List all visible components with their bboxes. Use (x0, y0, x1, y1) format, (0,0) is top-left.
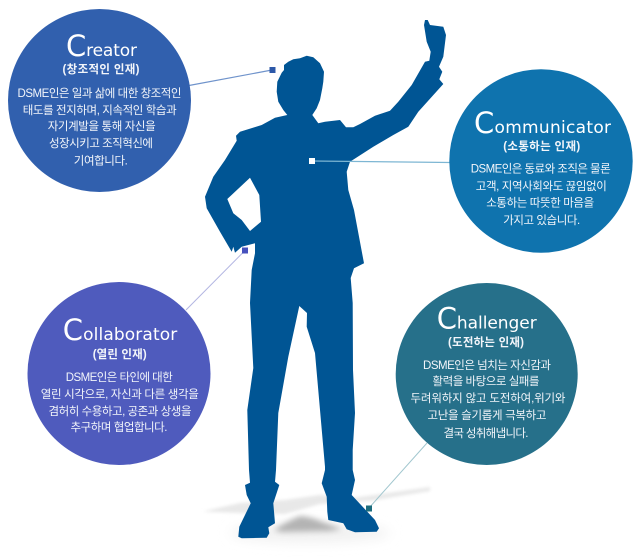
body text: Creator: 자기계발을 통해 자신을 (48, 120, 156, 133)
body text: Collaborator: DSME인은 타인에 대한 (66, 371, 173, 384)
body text: Creator: 성장시키고 조직혁신에 (49, 137, 153, 150)
heading: Collaborator: Collaborator (63, 313, 177, 347)
subheading: Collaborator: (열린 인재) (93, 347, 147, 361)
heading: Challenger: Challenger (437, 302, 537, 336)
body text: Communicator: 고객, 지역사회와도 끊임없이 (476, 180, 607, 193)
body text: Creator: DSME인은 일과 삶에 대한 창조적인 (18, 86, 182, 100)
body text: Creator: 태도를 전지하며, 지속적인 학습과 (23, 103, 177, 117)
heading: Communicator: Communicator (474, 106, 611, 140)
panel: Creator (8, 9, 191, 192)
floor shadow (203, 487, 430, 542)
body text: Collaborator: 열린 시각으로, 자신과 다른 생각을 (41, 388, 199, 401)
body text: Communicator (471, 162, 611, 227)
subheading: Communicator: (소통하는 인재) (503, 139, 580, 153)
panel: Collaborator (28, 282, 210, 465)
body text: Communicator: DSME인은 동료와 조직은 물론 (471, 162, 611, 176)
heading: Creator: Creator (66, 29, 137, 63)
body text: Communicator: 가지고 있습니다. (503, 214, 580, 227)
subheading: Creator: (창조적인 인재) (62, 62, 140, 76)
connector: Collaborator (186, 248, 248, 310)
body text: Collaborator (41, 371, 199, 434)
body text: Challenger: DSME인은 넘치는 자신감과 (423, 359, 551, 372)
body text: Challenger: 두려워하지 않고 도전하여,위기와 (410, 391, 566, 405)
body text: Communicator: 소통하는 따뜻한 마음을 (486, 196, 594, 210)
silhouette of a man raising a thumbs-up (205, 20, 446, 538)
body text: Creator: 기여합니다. (74, 154, 128, 168)
subheading: Challenger: (도전하는 인재) (448, 335, 524, 349)
body text: Challenger: 고난을 슬기롭게 극복하고 (428, 408, 546, 422)
connector: Creator (189, 67, 276, 86)
body text: Collaborator: 추구하며 협업합니다. (70, 420, 168, 434)
body text: Creator (18, 86, 182, 168)
connector: Communicator (309, 158, 450, 164)
connector: Challenger (366, 443, 427, 512)
body text: Challenger (410, 359, 566, 440)
body text: Challenger: 결국 성취해냅니다. (444, 427, 528, 440)
body text: Collaborator: 겸허히 수용하고, 공존과 상생을 (48, 404, 192, 418)
body text: Challenger: 활력을 바탕으로 실패를 (432, 374, 540, 388)
panel: Challenger (396, 283, 578, 465)
panel: Communicator (449, 69, 633, 253)
